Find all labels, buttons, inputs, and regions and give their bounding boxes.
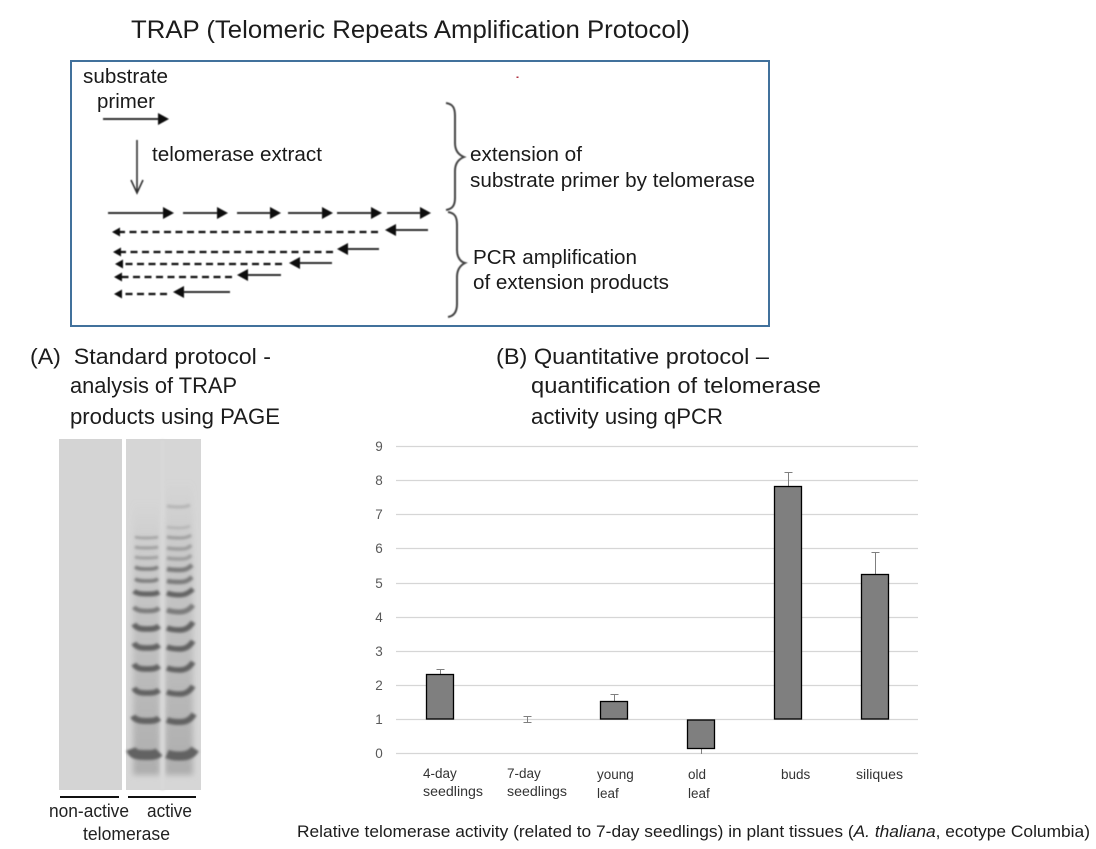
y axis labels: 9 <box>375 439 383 454</box>
lane gap <box>160 440 164 790</box>
label: PCR amplification: PCR amplification <box>473 247 637 269</box>
arrows: reverse primers <box>184 230 428 292</box>
y axis labels: 0 <box>375 746 383 761</box>
label: telomerase extract: telomerase extract <box>152 144 322 166</box>
category labels: leaf <box>597 786 619 801</box>
arrows: dashed amplification products <box>120 232 378 294</box>
gel underlines <box>60 796 196 798</box>
small red mark <box>516 76 518 78</box>
category labels: seedlings <box>507 784 567 799</box>
category labels: old <box>688 767 706 782</box>
heading: section B: activity using qPCR <box>531 404 723 429</box>
gel image: active lanes <box>126 439 201 790</box>
category labels: seedlings <box>423 784 483 799</box>
gel labels: non-active <box>49 801 129 821</box>
label: substrate primer: substrate <box>83 66 168 88</box>
y axis labels: 4 <box>375 610 383 625</box>
gel labels: telomerase <box>83 824 170 844</box>
heading: section A <box>30 344 280 429</box>
category labels: young <box>597 767 634 782</box>
chart caption: Relative telomerase activity (related to 7-day seedlings) in plant tissues ( A. thaliana, ecotype Columbia) <box>297 823 1090 841</box>
arrow: telomerase extract down <box>131 140 143 193</box>
label: substrate primer <box>83 66 168 113</box>
y axis labels: 2 <box>375 678 383 693</box>
bar chart <box>375 439 918 801</box>
label: substrate primer: primer <box>97 91 155 113</box>
gel image: non-active lane <box>59 439 122 790</box>
heading: section B <box>496 344 821 429</box>
DNA ladder bands <box>131 505 195 756</box>
y axis labels <box>375 439 383 761</box>
title: TRAP (Telomeric Repeats Amplification Protocol) <box>131 16 690 44</box>
heading: section A: (A) Standard protocol - <box>30 344 271 369</box>
y axis labels: 5 <box>375 576 383 591</box>
gel labels <box>49 801 192 844</box>
brace: PCR <box>448 212 465 317</box>
label: extension of substrate primer: extension of <box>470 144 582 166</box>
label: extension of substrate primer: substrate primer by telomerase <box>470 170 755 192</box>
category labels: leaf <box>688 786 710 801</box>
heading: section A: products using PAGE <box>70 404 280 429</box>
label: PCR amplification: of extension products <box>473 272 669 294</box>
y axis labels: 3 <box>375 644 383 659</box>
label: PCR amplification <box>473 247 669 294</box>
category labels: 7-day <box>507 766 541 781</box>
brace: extension <box>446 103 464 210</box>
bars <box>426 486 888 748</box>
arrows: extended primer repeats <box>108 212 420 214</box>
heading: section B: quantification of telomerase <box>531 373 821 398</box>
lane smears <box>133 480 193 775</box>
gridlines <box>396 446 918 754</box>
gel labels: active <box>147 801 192 821</box>
y axis labels: 1 <box>375 712 383 727</box>
heading: section B: (B) Quantitative protocol – <box>496 344 769 369</box>
panel: TRAP scheme <box>71 61 769 326</box>
label: extension of substrate primer <box>470 144 755 192</box>
category labels: 4-day <box>423 766 457 781</box>
category labels: buds <box>781 767 811 782</box>
y axis labels: 8 <box>375 473 383 488</box>
error bars <box>436 472 880 754</box>
y axis labels: 7 <box>375 507 383 522</box>
arrow: substrate primer <box>103 118 158 120</box>
y axis labels: 6 <box>375 541 383 556</box>
category labels: siliques <box>856 767 903 782</box>
heading: section A: analysis of TRAP <box>70 373 237 398</box>
category labels <box>423 766 903 801</box>
